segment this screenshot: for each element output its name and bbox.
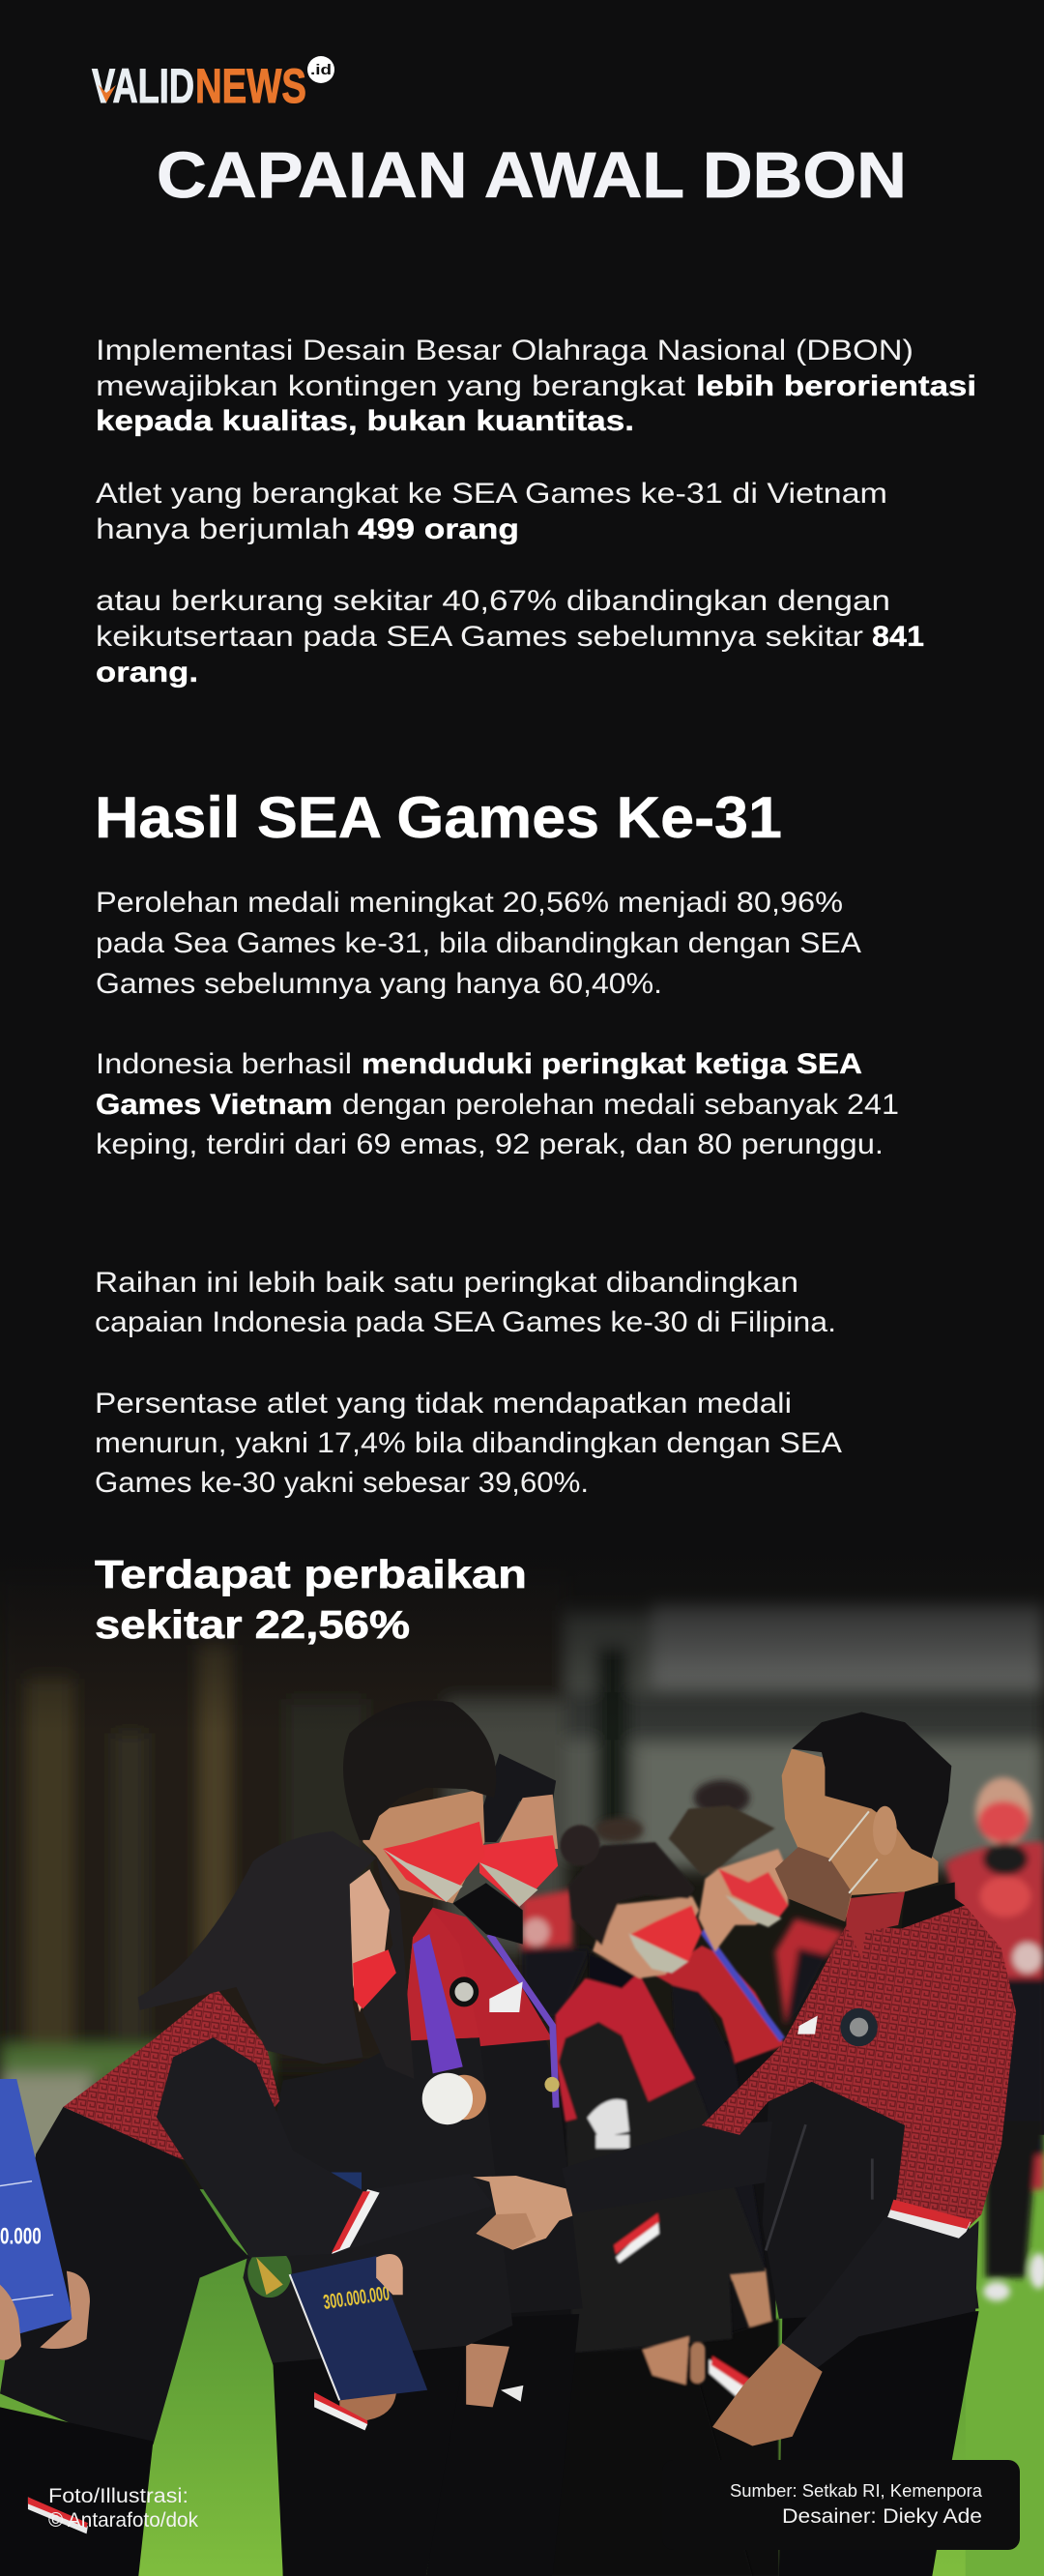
text block: 499 athletes: 499 orang: [358, 513, 519, 545]
blue cash-prize board, left: [0, 2079, 90, 2360]
navy cash-prize board: 300.000.000: [322, 2282, 391, 2314]
text block: athletes without medals: Games ke-30 yakni sebesar 39,60%.: [95, 1467, 589, 1499]
text block: comparison with 841 athletes: 841: [872, 621, 924, 653]
logo: Validnews.id: NEWS: [195, 59, 306, 113]
athlete 5: blurred short hair: [655, 1805, 789, 2576]
background crowd, right side: [522, 1777, 1044, 2301]
text block: comparison with 841 athletes: atau berkurang sekitar 40,67% dibandingkan dengan: [96, 585, 890, 617]
text block: third rank: Indonesia berhasil: [96, 1048, 352, 1080]
text block: comparison with 841 athletes: [96, 585, 924, 688]
photo background: trees, building, lawn: [0, 1508, 1044, 2576]
photo credit: Foto/Illustrasi:: [48, 2485, 188, 2507]
text block: 499 athletes: hanya berjumlah: [96, 513, 350, 545]
source and designer box: Sumber: Setkab RI, Kemenpora: [730, 2481, 983, 2501]
athlete 2: medal winner with short hair: [243, 1701, 512, 2576]
text block: DBON intro: Implementasi Desain Besar Olahraga Nasional (DBON): [96, 335, 914, 366]
callout: improvement 22.56%: sekitar 22,56%: [95, 1602, 410, 1647]
hair behind the face: [362, 1858, 414, 2079]
top fade into page background: [0, 1508, 1044, 1733]
text block: DBON intro: kepada kualitas, bukan kuantitas.: [96, 405, 634, 437]
navy cash-prize board: [247, 2172, 427, 2430]
source and designer box: [662, 2460, 1020, 2550]
athlete 1: bowing woman: [0, 1831, 494, 2576]
text block: medal increase: [96, 887, 861, 1000]
logo: Validnews.id: VALID: [92, 59, 194, 113]
photo: athletes greeted by the president: [0, 1508, 1044, 2576]
athlete 3: hijab: [403, 1753, 583, 2576]
text block: athletes without medals: Persentase atlet yang tidak mendapatkan medali: [95, 1388, 792, 1420]
source and designer box: Desainer: Dieky Ade: [782, 2505, 982, 2528]
photo credit: [48, 2485, 198, 2532]
text block: 499 athletes: Atlet yang berangkat ke SEA Games ke-31 di Vietnam: [96, 478, 887, 510]
text block: better ranking: [95, 1267, 836, 1338]
text block: third rank: dengan perolehan medali sebanyak 241: [342, 1089, 899, 1121]
text block: third rank: Games Vietnam: [96, 1089, 333, 1121]
text block: DBON intro: [96, 335, 976, 437]
text block: medal increase: pada Sea Games ke-31, bila dibandingkan dengan SEA: [96, 927, 861, 959]
dark backing behind the row of athletes: [279, 2026, 779, 2576]
text block: better ranking: Raihan ini lebih baik satu peringkat dibandingkan: [95, 1267, 798, 1299]
handshake: [473, 2176, 572, 2250]
text block: DBON intro: lebih berorientasi: [696, 370, 976, 402]
text block: 499 athletes: [96, 478, 887, 545]
heading: results: Hasil SEA Games Ke-31: [95, 785, 782, 850]
title: CAPAIAN AWAL DBON: [157, 139, 907, 212]
text block: athletes without medals: menurun, yakni 17,4% bila dibandingkan dengan SEA: [95, 1427, 842, 1459]
president in red and black jacket: [562, 1712, 1016, 2576]
blue cash-prize board, left: 0.000: [0, 2224, 42, 2249]
text block: athletes without medals: [95, 1388, 842, 1499]
callout: improvement 22.56%: [95, 1552, 527, 1647]
logo: Validnews.id: .id: [310, 62, 332, 78]
athlete 4: hair bun: [546, 1825, 766, 2576]
text block: medal increase: Games sebelumnya yang hanya 60,40%.: [96, 968, 662, 1000]
photo credit: © Antarafoto/dok: [48, 2509, 198, 2532]
logo: Validnews.id: [92, 56, 334, 113]
text block: comparison with 841 athletes: orang.: [96, 657, 198, 688]
text block: third rank: keping, terdiri dari 69 emas, 92 perak, dan 80 perunggu.: [96, 1128, 884, 1160]
text block: medal increase: Perolehan medali meningkat 20,56% menjadi 80,96%: [96, 887, 843, 919]
text block: comparison with 841 athletes: keikutsertaan pada SEA Games sebelumnya sekitar: [96, 621, 863, 653]
text block: third rank: [96, 1048, 899, 1160]
text block: DBON intro: mewajibkan kontingen yang berangkat: [96, 370, 686, 402]
text block: third rank: menduduki peringkat ketiga SEA: [362, 1048, 862, 1080]
text block: better ranking: capaian Indonesia pada SEA Games ke-30 di Filipina.: [95, 1306, 836, 1338]
callout: improvement 22.56%: Terdapat perbaikan: [95, 1552, 527, 1596]
